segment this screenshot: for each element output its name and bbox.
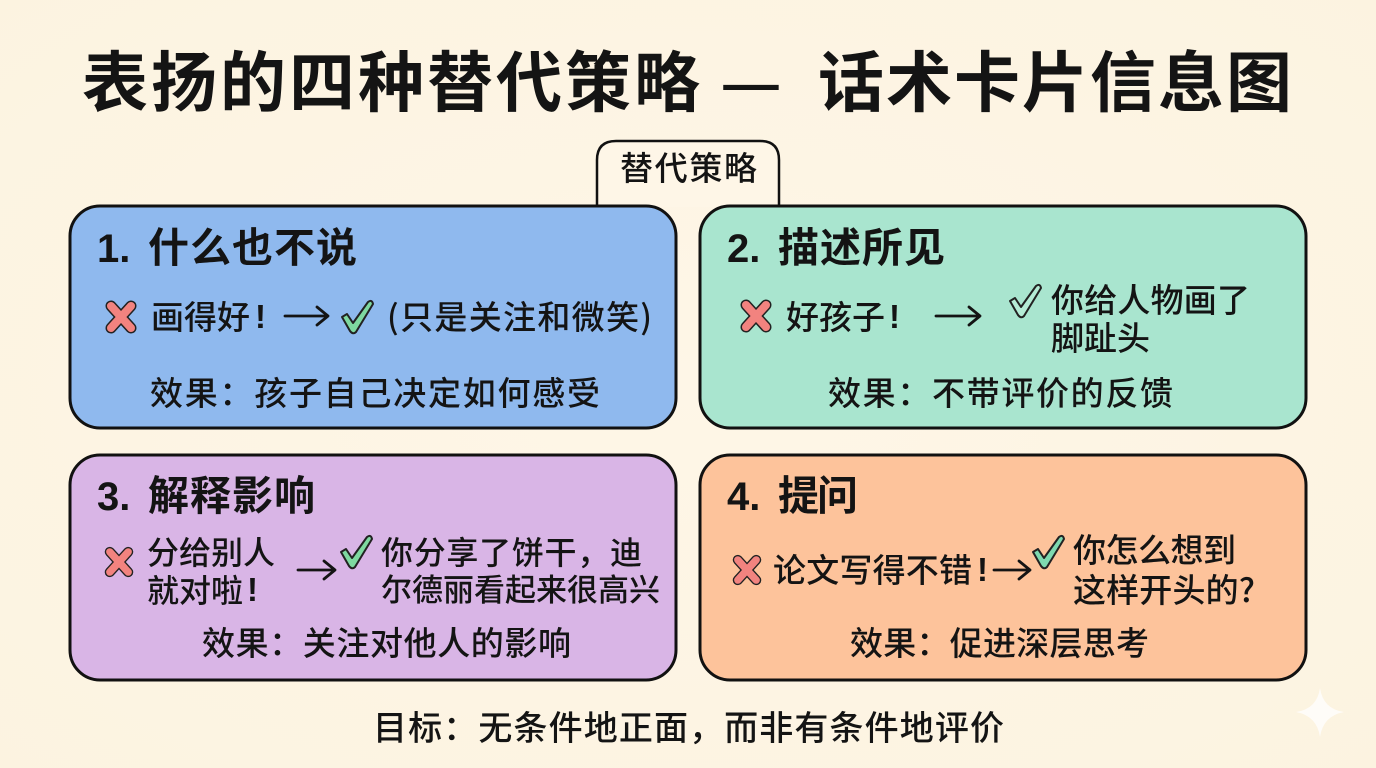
icon: red cross 1 (111, 306, 131, 328)
panel: 什么也不说 (70, 206, 676, 428)
title (82, 30, 1292, 126)
alternative phrase 2: 你给人物画了 (1051, 274, 1250, 322)
card heading 4: 4. (727, 475, 760, 519)
praise phrase 1: ! (255, 298, 266, 335)
panel: 描述所见 (700, 206, 1306, 428)
alternative phrase 2: 脚趾头 (1051, 312, 1150, 360)
footer goal: 目标：无条件地正面，而非有条件地评价 (373, 701, 1004, 750)
praise phrase 2: 好孩子 (786, 291, 885, 339)
effect 1: 效果：孩子自己决定如何感受 (150, 367, 600, 415)
icon: green check 1 (342, 301, 373, 333)
effect 2: 效果：不带评价的反馈 (828, 367, 1173, 415)
arrow 4 (994, 561, 1030, 579)
praise phrase 4: 论文写得不错 (773, 544, 972, 592)
icon: sparkle (1296, 688, 1344, 737)
icon: green check 2 (1010, 285, 1041, 317)
icon: red cross 4 (738, 560, 756, 580)
praise phrase 3: 分给别人 (147, 528, 275, 574)
alternative phrase 4: 这样开头的? (1073, 564, 1255, 612)
panel: 提问 (700, 455, 1306, 680)
tab: 替代策略: 替代策略 (620, 142, 757, 190)
effect 3: 效果：关注对他人的影响 (202, 617, 571, 665)
card heading 4: 提问 (778, 462, 858, 522)
alternative phrase 3: 尔德丽看起来很高兴 (381, 565, 660, 610)
title: 表扬的四种替代策略 (82, 30, 700, 126)
arrow 2 (936, 307, 980, 325)
card heading 2: 描述所见 (778, 214, 945, 274)
title: — (720, 30, 782, 126)
tab: 替代策略 (597, 141, 779, 207)
icon: red cross 2 (746, 305, 766, 327)
card heading 4 (727, 462, 858, 522)
praise phrase 1: 画得好 (151, 291, 250, 339)
alternative phrase 3 (381, 528, 660, 610)
card heading 3: 3. (97, 475, 130, 519)
title: 话术卡片信息图 (818, 30, 1292, 126)
arrow 1 (285, 307, 328, 325)
alternative phrase 4: 你怎么想到 (1073, 524, 1236, 572)
card heading 2: 2. (727, 227, 760, 271)
card heading 1: 1. (97, 227, 130, 271)
alternative phrase 1: (只是关注和微笑) (387, 291, 652, 339)
panel: 解释影响 (70, 455, 676, 680)
praise phrase 3: ! (247, 571, 258, 608)
praise phrase 4: ! (977, 551, 988, 588)
alternative phrase 4 (1073, 524, 1255, 612)
alternative phrase 3: 你分享了饼干，迪 (381, 528, 642, 574)
card heading 3: 解释影响 (148, 462, 315, 522)
alternative phrase 2 (1051, 274, 1250, 360)
arrow 3 (298, 561, 335, 579)
icon: green check 4 (1033, 536, 1064, 568)
effect 4: 效果：促进深层思考 (850, 617, 1149, 665)
praise phrase 3: 就对啦 (147, 566, 243, 612)
praise phrase 3 (147, 528, 275, 612)
card heading 1: 什么也不说 (148, 214, 357, 274)
icon: green check 3 (341, 536, 372, 568)
praise phrase 2: ! (889, 298, 900, 335)
icon: red cross 3 (110, 552, 128, 572)
